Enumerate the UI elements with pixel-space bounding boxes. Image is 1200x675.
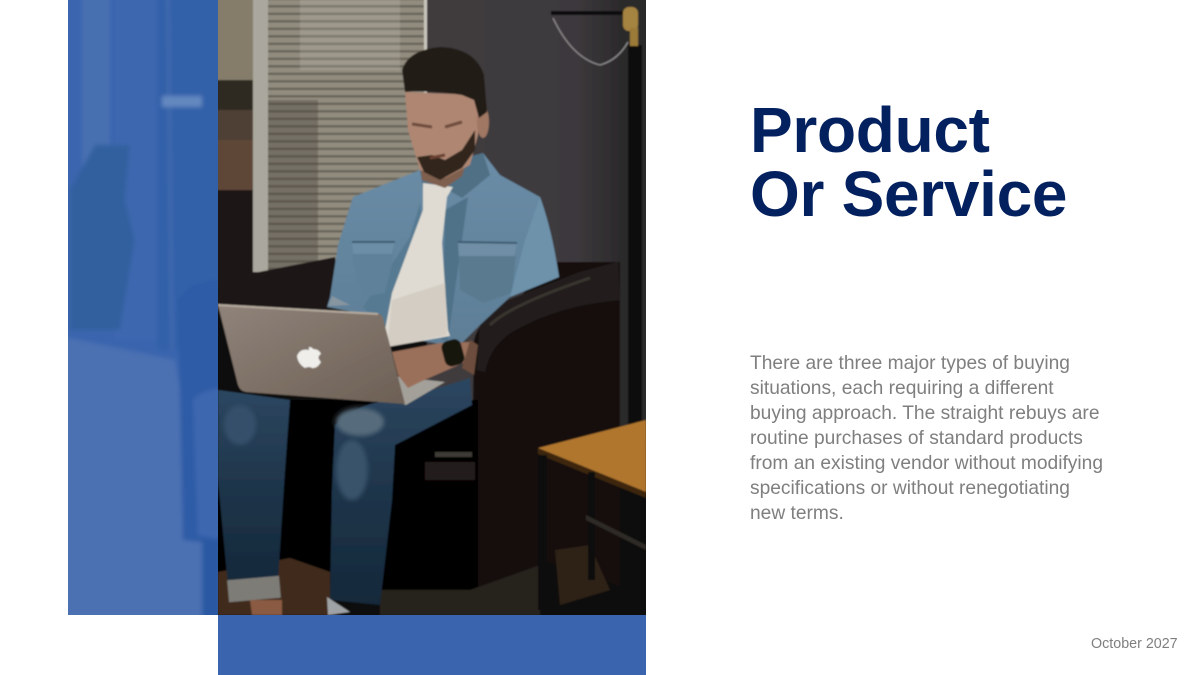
title: Product	[750, 94, 990, 166]
denim shirt	[327, 153, 559, 345]
armchair	[218, 256, 336, 310]
jeans	[218, 390, 290, 585]
body text: situations, each requiring a different	[750, 378, 1054, 399]
body text: from an existing vendor without modifying	[750, 453, 1103, 474]
hand and watch	[392, 342, 470, 388]
neck and head	[420, 168, 465, 189]
laptop	[397, 376, 446, 406]
apple logo	[297, 347, 321, 368]
title	[750, 94, 1067, 230]
floor lamp	[628, 45, 642, 425]
body text: specifications or without renegotiating	[750, 478, 1070, 499]
t-shirt	[385, 183, 453, 347]
date label: October 2027	[1091, 636, 1178, 652]
body text: buying approach. The straight rebuys are	[750, 403, 1100, 424]
body text	[750, 353, 1103, 524]
body text: routine purchases of standard products	[750, 428, 1083, 449]
blue overlay panel with tinted photo	[68, 0, 218, 615]
side table	[538, 420, 646, 492]
body text: There are three major types of buying	[750, 353, 1070, 374]
shirt pockets	[373, 270, 390, 294]
floor	[218, 558, 330, 615]
photo panel: man working on a laptop with blue overlay	[68, 0, 646, 675]
body text: new terms.	[750, 503, 844, 524]
blue footer bar	[218, 615, 646, 675]
back room and wall	[218, 284, 646, 615]
colour photo area	[218, 0, 646, 615]
title: Or Service	[750, 158, 1067, 230]
